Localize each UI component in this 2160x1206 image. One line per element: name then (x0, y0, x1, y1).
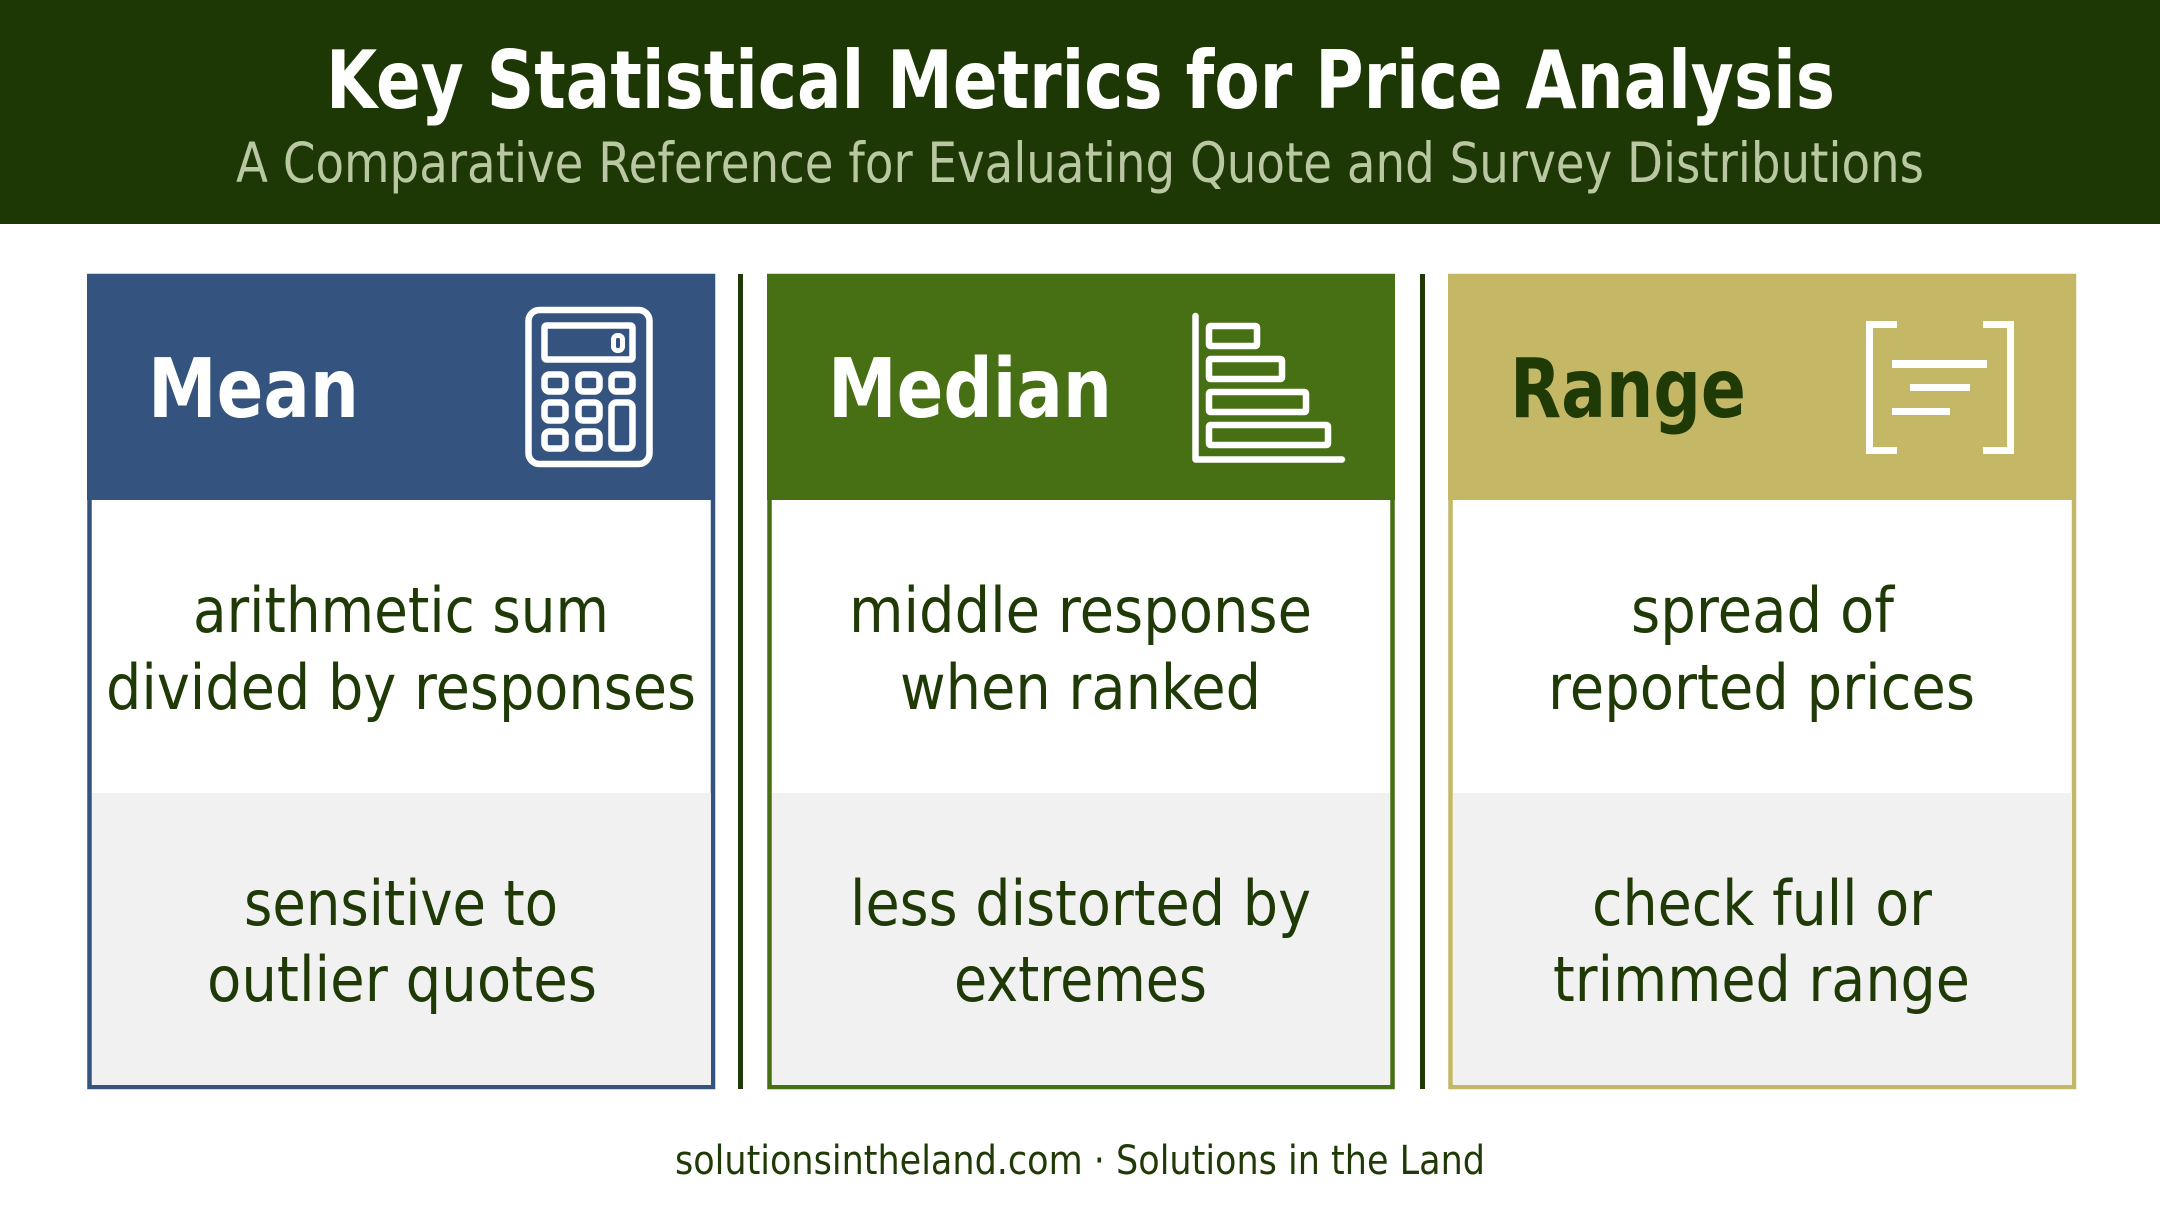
heading: mean: Mean (148, 342, 359, 437)
icon: calculator (528, 310, 650, 464)
median definition (849, 574, 1312, 724)
footer: solutionsintheland.com · Solutions in the Land (675, 1138, 1485, 1184)
icon: bar chart (1196, 316, 1342, 460)
mean caveat (207, 867, 597, 1016)
panel: mean (87, 274, 715, 1087)
median caveat: extremes (954, 943, 1207, 1016)
range caveat: trimmed range (1553, 943, 1970, 1016)
median caveat: less distorted by (850, 867, 1311, 940)
range caveat (1553, 867, 1970, 1016)
panel: median (767, 274, 1395, 1087)
panel: range (1448, 274, 2076, 1087)
mean definition: divided by responses (106, 651, 696, 724)
median definition: when ranked (900, 651, 1261, 724)
divider (1420, 274, 1425, 1089)
icon: bracketed lines (1870, 324, 2010, 450)
mean definition: arithmetic sum (193, 574, 609, 647)
range definition (1548, 574, 1975, 724)
median caveat (850, 867, 1311, 1016)
divider (738, 274, 743, 1089)
median definition: middle response (849, 574, 1312, 647)
mean caveat: sensitive to (244, 867, 558, 940)
median heading bar (767, 274, 1395, 500)
title: Key Statistical Metrics for Price Analysis (326, 34, 1835, 127)
mean lower row background (92, 793, 711, 1085)
range definition: spread of (1631, 574, 1896, 647)
header band (0, 0, 2160, 224)
range lower row background (1453, 793, 2072, 1085)
range definition: reported prices (1548, 651, 1975, 724)
mean definition (106, 574, 696, 724)
heading: median: Median (828, 342, 1112, 437)
range heading bar (1448, 274, 2076, 500)
median lower row background (772, 793, 1390, 1085)
heading: range: Range (1510, 342, 1746, 437)
mean caveat: outlier quotes (207, 943, 597, 1016)
range caveat: check full or (1592, 867, 1932, 940)
mean heading bar (87, 274, 715, 500)
